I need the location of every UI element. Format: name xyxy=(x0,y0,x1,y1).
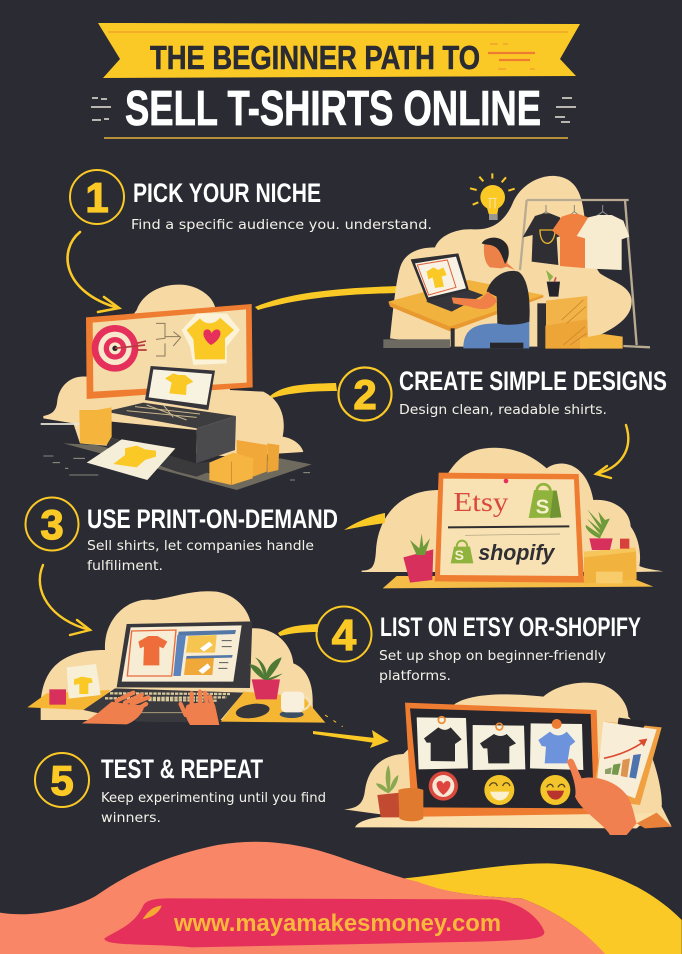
website url: www.mayamakesmoney.com xyxy=(173,910,501,937)
shirt card blue xyxy=(530,719,583,770)
icon: light bulb xyxy=(470,173,515,220)
step 4 number badge xyxy=(316,606,372,662)
arrow: step 1 to target board xyxy=(68,232,119,312)
step 4 description: Set up shop on beginner-friendly xyxy=(379,649,606,664)
cream cloud backdrop xyxy=(344,683,672,827)
icon: Shopify bag large xyxy=(529,484,561,519)
url pill xyxy=(104,898,544,947)
title banner xyxy=(98,23,580,78)
step 5 description xyxy=(101,791,326,826)
clothes rack xyxy=(520,200,650,347)
small framed shirt card xyxy=(49,664,101,705)
printer xyxy=(102,403,236,477)
step 5 description: Keep experimenting until you find xyxy=(101,791,326,806)
step 5 number badge xyxy=(35,753,89,807)
yellow wave xyxy=(404,863,682,954)
Etsy wordmark: Etsy xyxy=(453,487,509,517)
cardboard boxes right xyxy=(209,440,279,485)
title line one: THE BEGINNER PATH TO xyxy=(150,39,480,76)
pointing hand xyxy=(567,759,672,835)
step 1 heading: PICK YOUR NICHE xyxy=(133,178,321,208)
laptop on printer xyxy=(145,366,215,410)
computer mouse xyxy=(235,702,270,720)
step 1 description: Find a specific audience you. understand. xyxy=(131,218,432,233)
reaction laughing emoji xyxy=(540,775,570,805)
package and pot right xyxy=(584,509,637,583)
step 2 description: Design clean, readable shirts. xyxy=(399,403,607,418)
cream cloud backdrop xyxy=(390,176,632,347)
cardboard boxes left xyxy=(79,407,112,445)
floor mat xyxy=(63,443,312,490)
arrow: printer to step 2 xyxy=(270,383,337,398)
step 3 number badge xyxy=(26,498,78,550)
cream cloud backdrop xyxy=(41,591,313,720)
shirt card black 1 xyxy=(417,717,468,769)
laptop screen xyxy=(117,621,252,688)
step 2 number badge xyxy=(338,368,392,420)
black t-shirt xyxy=(523,205,564,265)
arrow: step 2 to storefront xyxy=(596,425,628,478)
step 2 number badge: 2 xyxy=(353,371,377,418)
desk surface xyxy=(27,690,325,723)
reaction smile emoji xyxy=(484,775,514,805)
step 4 description: platforms. xyxy=(379,669,451,684)
shirt card black 2 xyxy=(473,723,525,770)
desk surface xyxy=(383,576,653,588)
laptop keyboard xyxy=(83,688,243,723)
illustration: target board and printer xyxy=(41,285,312,490)
clipboard with growth chart xyxy=(593,718,662,805)
coral wave xyxy=(0,842,605,954)
arrow: scene 2 board to person scene xyxy=(255,286,398,310)
cream cloud backdrop xyxy=(362,448,663,572)
Shopify wordmark: shopify xyxy=(478,540,556,565)
illustration: laptop listing screen xyxy=(27,591,343,727)
store sign board xyxy=(435,473,584,583)
desk xyxy=(383,280,543,348)
pen cup xyxy=(546,270,560,297)
icon: Shopify bag small xyxy=(451,541,473,563)
arrow: step 3 to storefront xyxy=(344,513,385,530)
step 5 heading: TEST & REPEAT xyxy=(101,754,263,784)
icon: Shopify bag large: S xyxy=(536,496,549,519)
step 1 number badge: 1 xyxy=(85,174,109,221)
small potted plant and orange cup xyxy=(376,765,423,821)
title line two: SELL T-SHIRTS ONLINE xyxy=(125,82,541,136)
orange t-shirt xyxy=(552,205,588,268)
illustration: person designing at desk xyxy=(383,173,650,349)
stacked cardboard boxes xyxy=(537,296,623,349)
icon: Shopify bag small: S xyxy=(455,547,464,563)
illustration: test board with reactions xyxy=(344,683,672,835)
cream t-shirt xyxy=(577,205,629,270)
step 4 description xyxy=(379,649,606,684)
footer waves xyxy=(0,842,682,954)
potted plant xyxy=(249,657,283,699)
target board xyxy=(86,304,253,399)
step 5 description: winners. xyxy=(101,811,161,826)
step 5 number badge: 5 xyxy=(50,757,74,804)
printed sheet with t-shirt xyxy=(87,439,175,480)
laptop xyxy=(411,253,483,312)
step 3 description xyxy=(87,539,314,574)
step 4 number badge: 4 xyxy=(332,611,357,660)
person xyxy=(452,238,530,348)
typing hands xyxy=(82,692,219,725)
corkboard frame xyxy=(405,703,600,817)
step 1 number badge xyxy=(70,170,124,224)
arrow: step 4 connector xyxy=(278,624,318,636)
step 3 description: fulfiliment. xyxy=(87,559,163,574)
step 3 heading: USE PRINT-ON-DEMAND xyxy=(87,504,338,534)
icon: t-shirt with heart xyxy=(182,313,240,365)
reaction heart badge xyxy=(429,771,458,801)
step 3 description: Sell shirts, let companies handle xyxy=(87,539,314,554)
cream cloud backdrop xyxy=(43,285,303,457)
coffee mug xyxy=(280,692,310,718)
illustration: Etsy and Shopify board xyxy=(362,448,663,588)
arrow: laptop to test board xyxy=(313,730,389,748)
plant in pink pot xyxy=(403,533,433,583)
step 3 number badge: 3 xyxy=(40,501,64,548)
icon: target xyxy=(92,325,147,372)
arrow: step 3 to laptop xyxy=(40,565,90,635)
